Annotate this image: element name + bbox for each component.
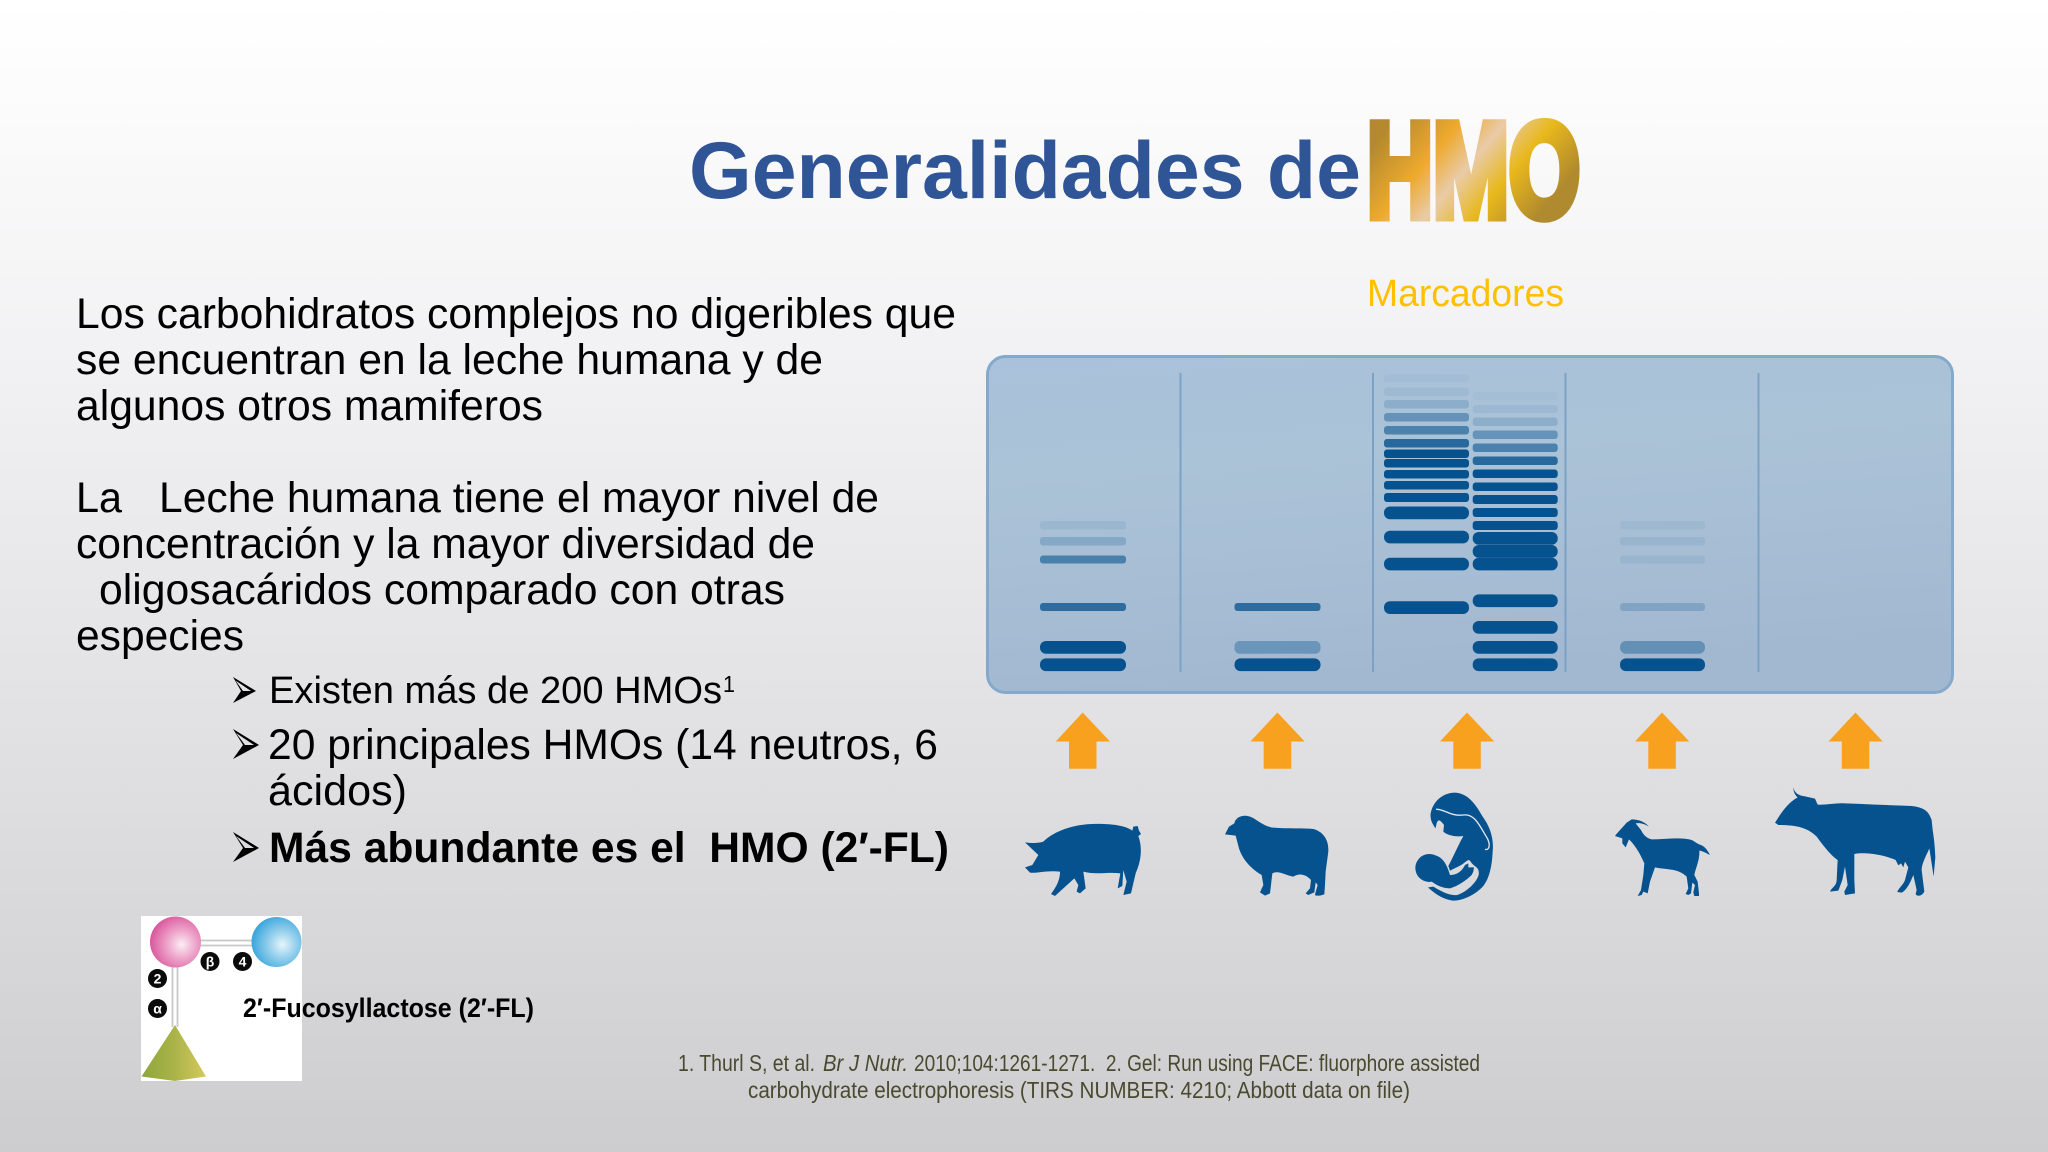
footnote: 2010;104:1261-1271. 2. Gel: Run using FACE: fluorphore assisted	[914, 1050, 1480, 1076]
bullet: more than 200 HMOs: 1	[723, 671, 735, 697]
icon: cow	[1775, 787, 1935, 896]
molecule label: 2′-Fucosyllactose (2′-FL)	[243, 993, 534, 1023]
arrow: cow	[1828, 712, 1883, 769]
gel panel	[988, 356, 1952, 692]
lane 4: goat	[1620, 521, 1705, 671]
footnote: carbohydrate electrophoresis (TIRS NUMBER: 4210; Abbott data on file)	[748, 1077, 1410, 1103]
icon: goat	[1615, 819, 1710, 896]
title text: Generalidades de	[689, 126, 1361, 216]
linkage badges: α	[153, 1000, 162, 1016]
icon: sheep	[1225, 816, 1328, 896]
bullet list	[233, 670, 949, 872]
text block: definition: Los carbohidratos complejos no digeribles que	[76, 290, 956, 338]
molecule diagram: 2'-FL	[141, 916, 302, 1081]
footnote	[678, 1050, 1480, 1103]
text block: definition	[76, 290, 956, 430]
arrow: goat	[1635, 712, 1689, 769]
up arrows	[1056, 712, 1883, 769]
text block: human milk: oligosacáridos comparado con otras	[99, 566, 785, 614]
text block: human milk: Leche humana tiene el mayor nivel de	[159, 474, 879, 522]
text block: human milk: especies	[76, 612, 244, 660]
icon: mother and baby	[1415, 793, 1493, 901]
bullet: 20 main HMOs: ácidos)	[268, 767, 407, 815]
text block: human milk: La	[76, 474, 122, 522]
bullet: more than 200 HMOs: Existen más de 200 HMOs	[269, 670, 722, 712]
bullet: 20 main HMOs: 20 principales HMOs (14 neutros, 6	[268, 721, 938, 769]
linkage badges: 2	[154, 970, 162, 986]
linkage badges	[148, 952, 252, 1018]
text block: human milk: concentración y la mayor diversidad de	[76, 520, 815, 568]
bullet: most abundant HMO: Más abundante es el HMO (2′-FL)	[269, 824, 949, 872]
lane 2: sheep	[1234, 603, 1320, 671]
footnote: 1. Thurl S, et al.	[678, 1050, 815, 1076]
bullet: 20 main HMOs	[233, 721, 938, 815]
footnote: Br J Nutr.	[823, 1050, 908, 1076]
linkage badges: 4	[239, 954, 247, 970]
sugar: blue sphere	[252, 917, 302, 967]
lane 1: pig	[1040, 521, 1126, 671]
sugar: olive pyramid	[142, 1025, 206, 1081]
title	[689, 96, 1580, 246]
text block: definition: se encuentran en la leche humana y de	[76, 336, 823, 384]
arrow: sheep	[1250, 712, 1305, 769]
title highlight: HMO: HMO	[1367, 96, 1580, 246]
arrow: pig	[1056, 712, 1110, 769]
linkage badges: β	[206, 954, 215, 970]
animal silhouettes	[1025, 787, 1935, 901]
markers label: Marcadores	[1367, 273, 1564, 315]
icon: pig	[1025, 824, 1141, 896]
text block: definition: algunos otros mamiferos	[76, 382, 543, 430]
sugar: pink sphere	[150, 916, 201, 968]
lane 3: human milk	[1384, 374, 1558, 671]
text block: human milk	[76, 474, 879, 660]
arrow: human	[1440, 712, 1494, 769]
